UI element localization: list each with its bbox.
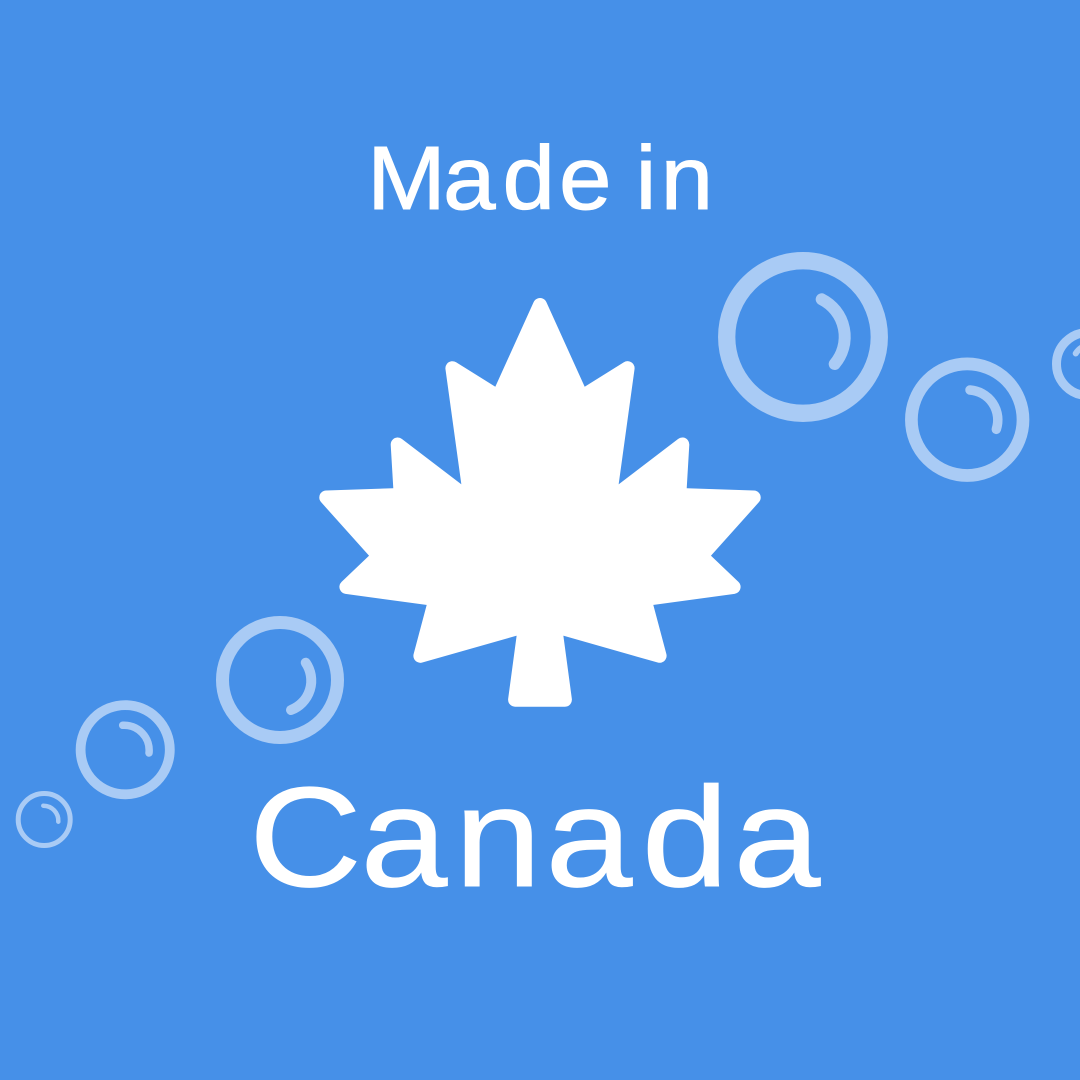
heading: Made in: Made in xyxy=(367,127,713,229)
heading: Canada: Canada xyxy=(249,758,820,916)
bubble: small right edge xyxy=(1056,332,1080,396)
bubble: medium upper xyxy=(911,364,1023,476)
bubble: large upper xyxy=(727,261,879,413)
icon: maple leaf xyxy=(326,305,754,700)
bubble: lower large xyxy=(222,622,338,738)
bubble: lower small xyxy=(18,794,70,846)
bubble: lower medium xyxy=(81,705,170,794)
